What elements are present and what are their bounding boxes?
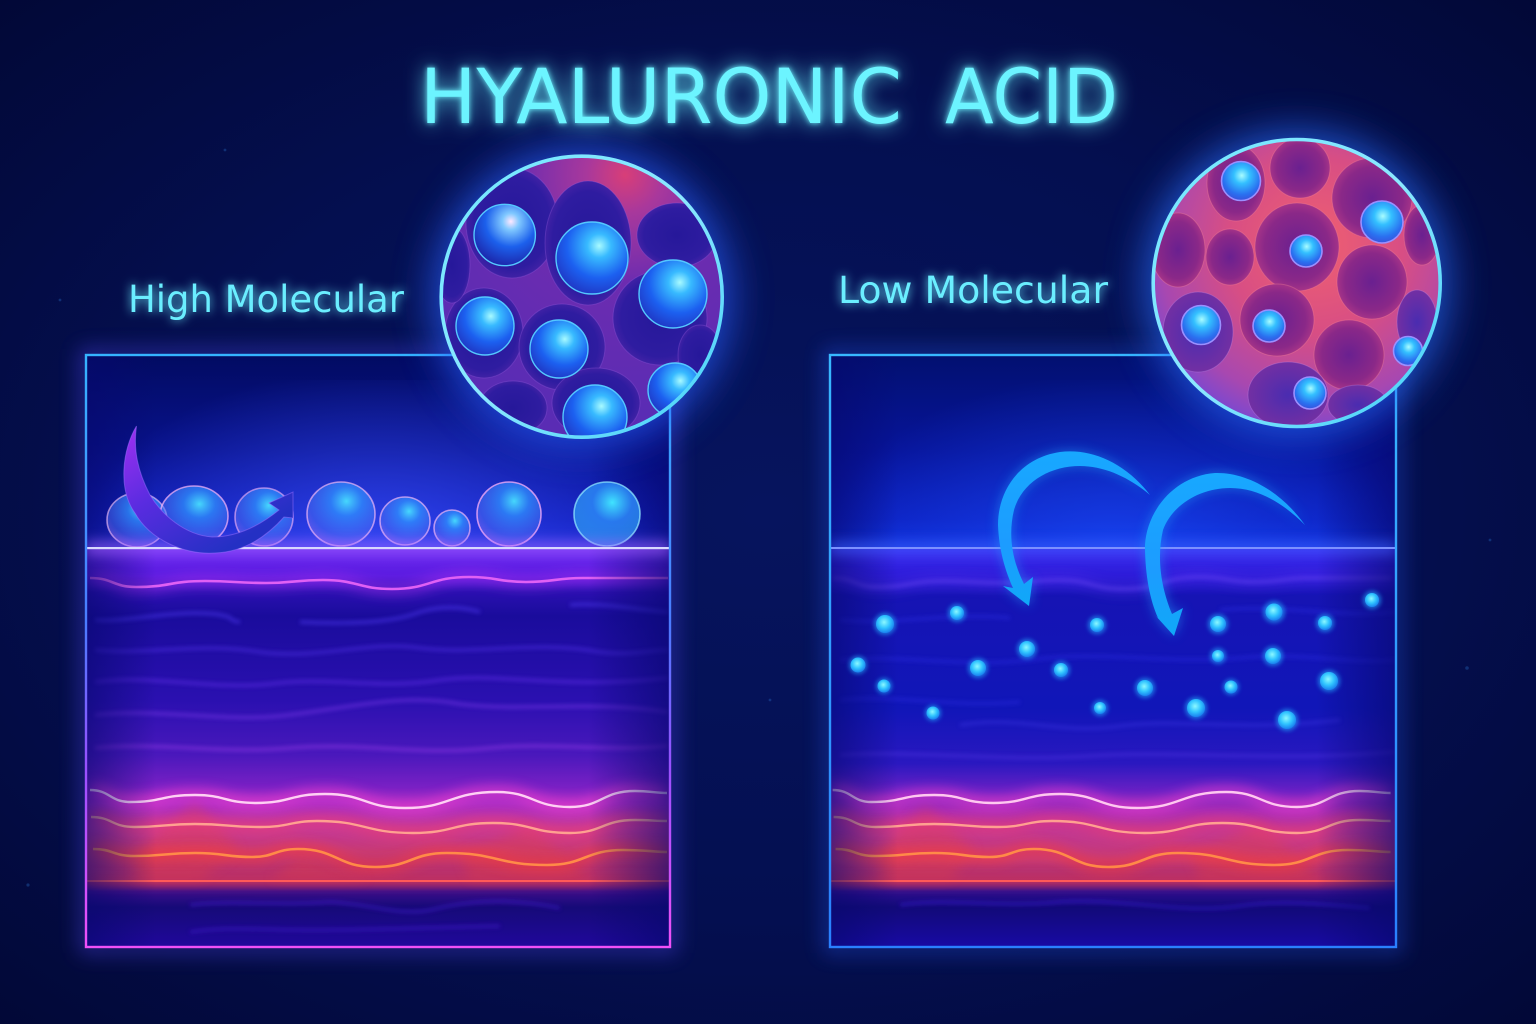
skin layers xyxy=(830,355,1396,947)
wave lines xyxy=(833,577,1392,589)
magnified circle: high molecular xyxy=(432,147,732,449)
panel border xyxy=(86,355,670,947)
title: ACID xyxy=(945,52,1118,141)
wave lines xyxy=(86,577,670,932)
molecules xyxy=(456,204,707,449)
skin layers xyxy=(86,355,670,947)
molecules xyxy=(1182,162,1422,409)
cells xyxy=(434,168,722,438)
lens ring xyxy=(1153,140,1440,426)
bubbles: large HA molecules on surface xyxy=(107,482,640,547)
skin surface line xyxy=(86,541,670,555)
magnified circle: low molecular xyxy=(1145,131,1449,435)
surface line xyxy=(830,542,1396,554)
label: high molecular: High Molecular xyxy=(128,278,405,321)
base line xyxy=(830,878,1396,884)
base line xyxy=(86,878,670,884)
panel outer glow xyxy=(86,355,670,947)
panel: low molecular xyxy=(830,355,1396,947)
arrow: penetrating right xyxy=(1145,473,1305,636)
label: low molecular: Low Molecular xyxy=(838,269,1109,312)
cells xyxy=(1151,138,1440,390)
small HA molecules in skin xyxy=(849,591,1381,731)
arrow: sliding across surface xyxy=(124,426,293,553)
red patches xyxy=(880,805,1320,880)
title: HYALURONIC xyxy=(420,52,902,141)
panel border xyxy=(830,355,1396,947)
lens ring xyxy=(441,156,722,437)
red patches xyxy=(135,800,590,880)
arrow: penetrating left xyxy=(998,451,1150,606)
background glow specks xyxy=(26,149,1491,887)
panel outer glow xyxy=(830,355,1396,947)
panel: high molecular xyxy=(86,355,670,947)
